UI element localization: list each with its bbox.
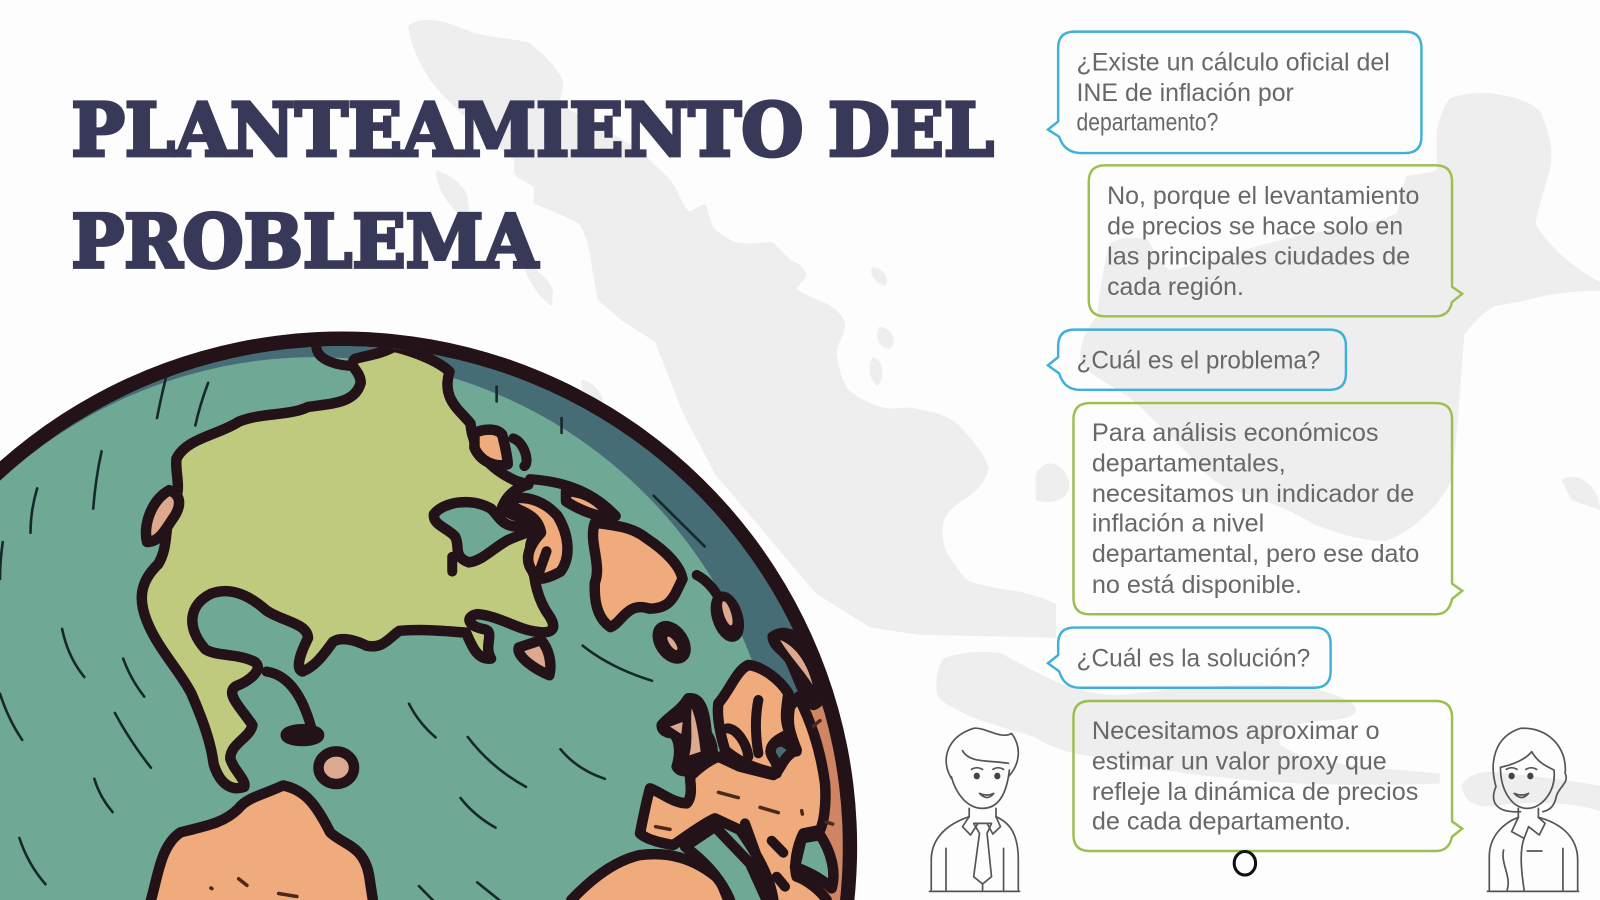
- bubble: INE question: INE de inflación por: [1077, 79, 1294, 107]
- land: northern strip: [566, 491, 610, 518]
- land: south tip: [519, 640, 550, 675]
- bubble: problem question: [1048, 330, 1346, 390]
- land: north america: [142, 347, 553, 788]
- ireland light: [689, 708, 701, 755]
- mediterranean sea: [685, 827, 767, 900]
- background map silhouette: [408, 20, 1600, 811]
- island two tail: [697, 575, 720, 600]
- island one light: [667, 636, 678, 650]
- island two: [711, 594, 743, 639]
- bubble: problem answer: departamental, pero ese dato: [1092, 540, 1419, 568]
- icon: woman: [1488, 728, 1579, 891]
- bubble: solution answer: [1073, 701, 1462, 851]
- bubble: price survey answer: las principales ciudades de: [1107, 242, 1410, 270]
- central america tip: [286, 729, 319, 741]
- bubble: solution question: [1048, 628, 1331, 688]
- title: [71, 88, 994, 285]
- eurasia: [640, 697, 827, 900]
- bubble: price survey answer: No, porque el levantamiento: [1107, 182, 1419, 210]
- africa: [571, 854, 728, 900]
- land: greenland-like island: [593, 523, 683, 627]
- bubble: problem answer: departamentales,: [1092, 449, 1286, 477]
- inner sea: [795, 835, 833, 888]
- bubble: INE question: departamento?: [1077, 109, 1218, 137]
- title: PROBLEMA: [71, 199, 539, 285]
- bubble: problem answer: necesitamos un indicador de: [1092, 480, 1414, 508]
- land: top arctic coast: [316, 346, 358, 366]
- bubble: problem answer: [1073, 403, 1462, 614]
- bubble: price survey answer: cada región.: [1107, 273, 1244, 301]
- north rim land: [773, 633, 822, 705]
- bubble: price survey answer: de precios se hace solo en: [1107, 213, 1403, 241]
- icon: man with tie: [929, 728, 1020, 891]
- british isles light: [670, 722, 683, 734]
- small circle marker: [1234, 852, 1256, 875]
- land: south america: [151, 785, 373, 900]
- scandinavia: [718, 665, 790, 773]
- northern coast marks: [452, 438, 616, 583]
- globe illustration: [0, 332, 857, 900]
- bubble: problem question: ¿Cuál es el problema?: [1077, 346, 1320, 374]
- land spots: [656, 721, 833, 829]
- europe and africa: [571, 575, 857, 900]
- bubble: solution answer: Necesitamos aproximar o: [1092, 717, 1380, 745]
- central america ridge: [266, 672, 314, 736]
- land: south america marks: [211, 879, 297, 896]
- island two light: [722, 601, 733, 626]
- bubble: INE question: ¿Existe un cálculo oficial del: [1077, 48, 1390, 76]
- red sea strokes: [745, 823, 785, 900]
- title: PLANTEAMIENTO DEL: [71, 88, 994, 174]
- bubble: problem answer: inflación a nivel: [1092, 510, 1264, 538]
- land: north island: [474, 430, 508, 465]
- land: lake shore: [513, 498, 568, 579]
- bubble: problem answer: no está disponible.: [1092, 571, 1302, 599]
- bubble: solution answer: estimar un valor proxy que: [1092, 747, 1387, 775]
- baltic marks: [727, 700, 797, 757]
- rim shading: [810, 706, 843, 900]
- bubble: solution answer: de cada departamento.: [1092, 808, 1351, 836]
- north rim light: [780, 640, 813, 685]
- bubble: solution question: ¿Cuál es la solución?: [1077, 644, 1310, 672]
- island one: [652, 621, 691, 664]
- british isles: [662, 698, 713, 771]
- bubble: problem answer: Para análisis económicos: [1092, 419, 1379, 447]
- land: left island: [146, 490, 179, 542]
- bubble: price survey answer: [1089, 165, 1462, 316]
- lake: [434, 502, 537, 562]
- bubble: INE question: [1048, 32, 1421, 153]
- bubble: solution answer: refleje la dinámica de precios: [1092, 778, 1418, 806]
- land: small caribbean island: [319, 751, 354, 784]
